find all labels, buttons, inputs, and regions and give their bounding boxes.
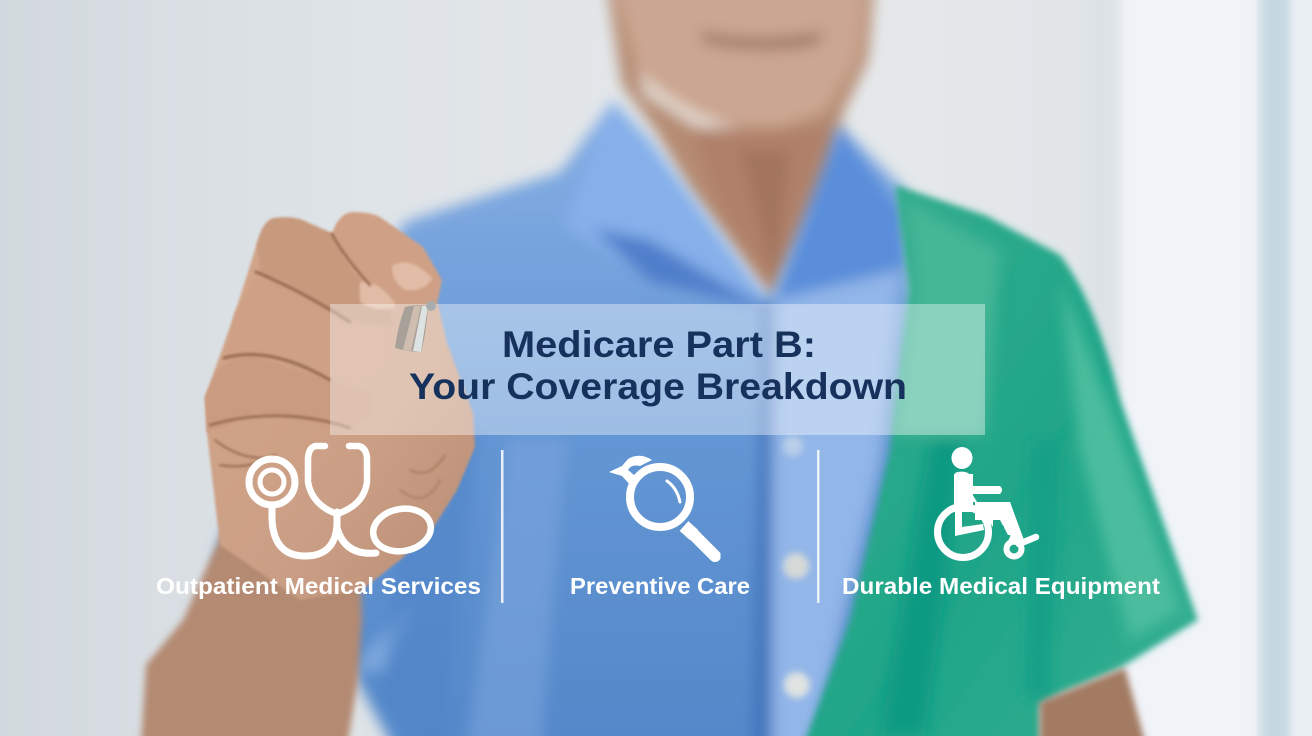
green garment [798,185,1198,736]
finger gaps and palm creases [210,234,445,498]
icon: magnifying glass [609,456,715,556]
title [409,324,907,407]
shirt buttons [783,436,810,698]
title: Medicare Part B: [502,324,816,365]
right forearm [1040,668,1150,736]
label: Outpatient Medical Services: Outpatient Medical Services [156,573,481,599]
photo: blurred man in shirt [215,0,1198,736]
fingers [205,212,442,433]
label: Durable Medical Equipment: Durable Medical Equipment [842,573,1160,599]
icon: stethoscope [249,446,434,556]
photo: hand [140,212,475,736]
palm [205,233,475,600]
divider: left [501,450,504,603]
shirt body [215,100,925,736]
neck and face [606,0,875,300]
divider: right [817,450,820,603]
title panel [330,304,985,435]
pen tip held in fingers [395,301,436,352]
title: Your Coverage Breakdown [409,366,907,407]
label: Preventive Care: Preventive Care [570,573,750,599]
forearm [140,533,362,736]
icon: wheelchair [938,447,1036,558]
